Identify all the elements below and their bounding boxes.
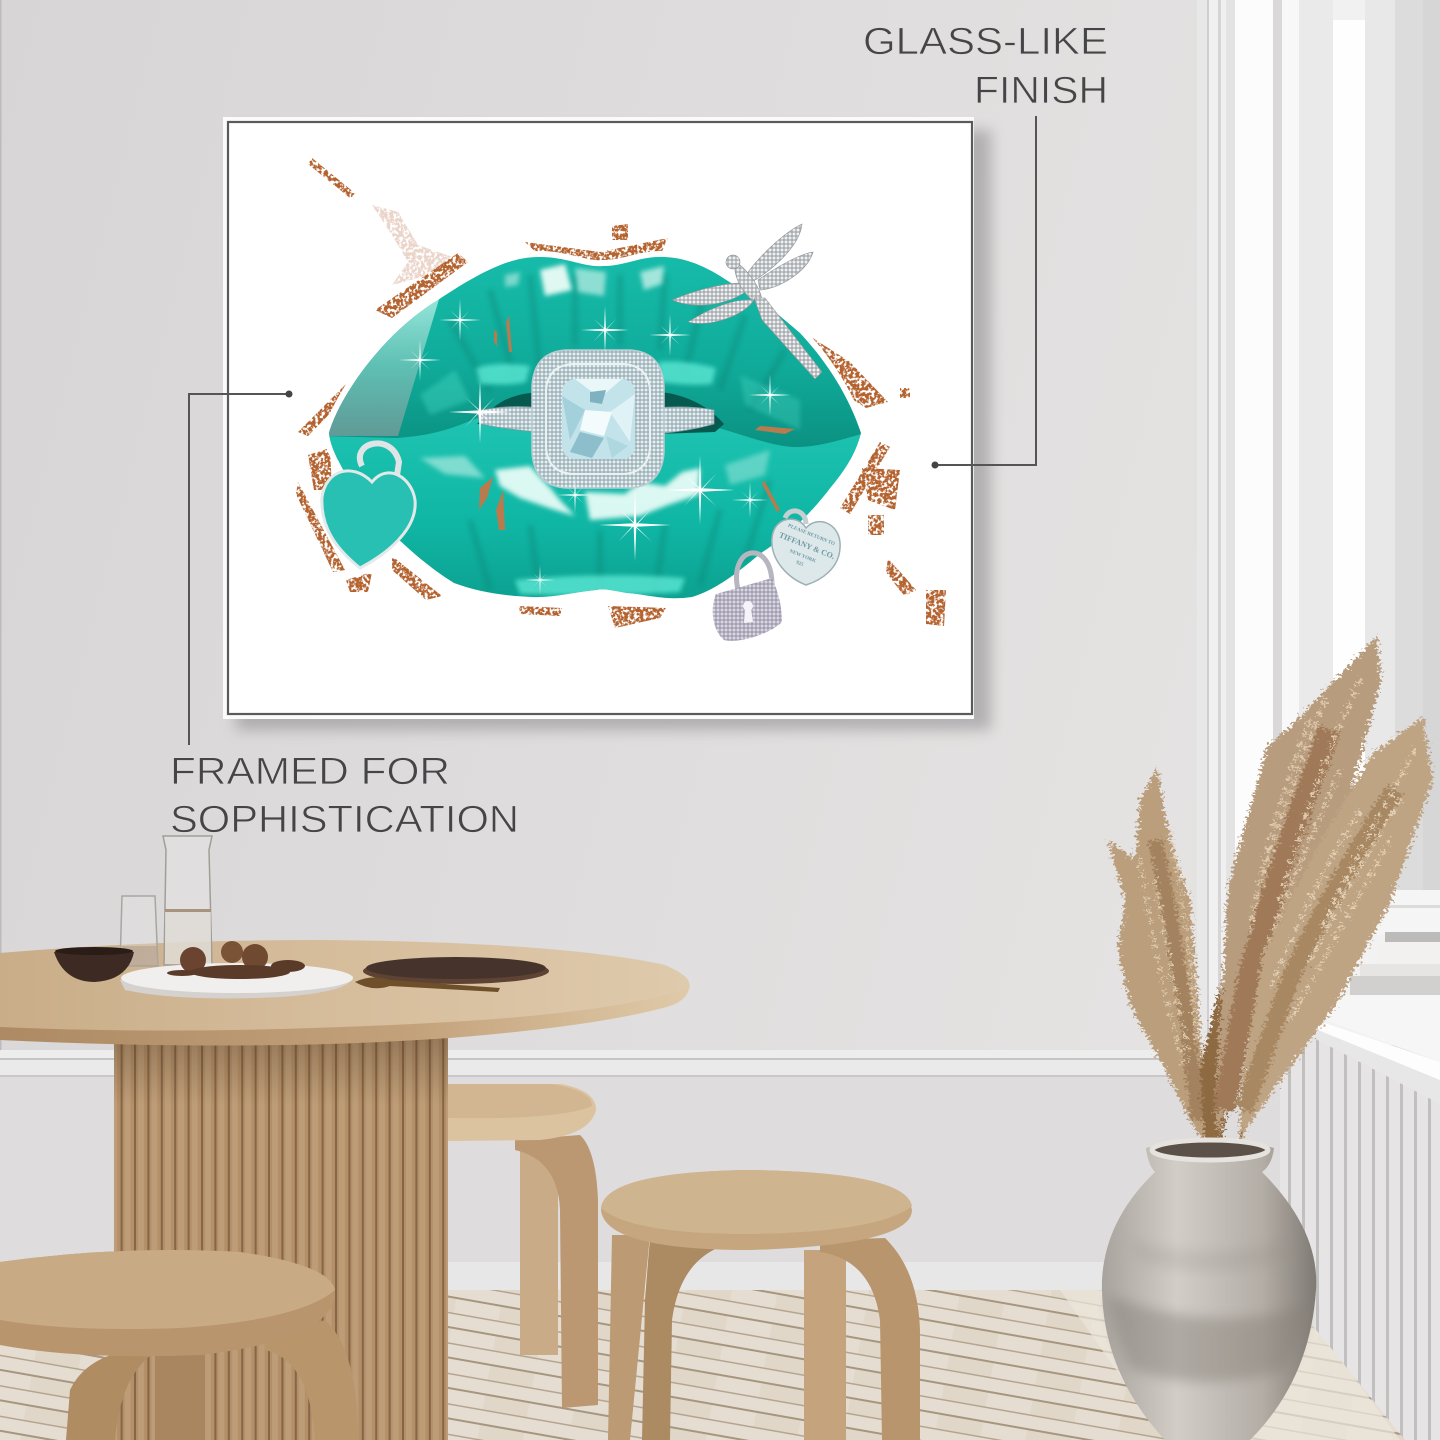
inner halo ring <box>546 364 650 474</box>
pedestal shadow <box>114 1035 448 1105</box>
return to Tiffany tag charm <box>771 511 840 585</box>
fluted pedestal <box>114 1030 448 1440</box>
dark wooden plate <box>363 957 549 984</box>
mouth opening <box>477 392 724 436</box>
teal heart charm <box>322 443 415 568</box>
window frame and trim <box>1197 0 1440 1045</box>
diamond ring <box>477 350 714 488</box>
upper lip <box>320 250 870 460</box>
bright teal glints <box>420 361 800 595</box>
inner canvas <box>228 122 972 714</box>
teal lips <box>320 250 870 610</box>
pampas grass in vase <box>1108 636 1433 1150</box>
rose gold flecks on lips <box>479 316 795 530</box>
ring halo <box>532 350 664 488</box>
sparkles <box>326 299 791 595</box>
callout leader line <box>936 116 1036 465</box>
frame shadow <box>236 130 991 730</box>
centre diamond <box>562 379 635 459</box>
white gloss patches lower lip <box>420 450 770 520</box>
tag engraving: PLEASE RETURN TO <box>787 524 835 547</box>
white gloss patches upper lip <box>505 264 664 296</box>
round dining table <box>0 940 690 1440</box>
chocolates <box>167 941 305 979</box>
callout: framed for sophistication <box>170 390 519 841</box>
right plume <box>1240 717 1433 1145</box>
marble tray <box>120 963 353 998</box>
table edge <box>0 985 690 1046</box>
pave padlock charm <box>713 553 782 641</box>
dark bowl <box>54 947 134 982</box>
spoon <box>355 977 500 992</box>
radiator <box>1280 1036 1440 1440</box>
glass carafe <box>163 836 212 965</box>
pale pink glitter splash <box>372 205 455 285</box>
lower lip <box>320 418 870 610</box>
dragonfly brooch <box>672 224 822 379</box>
tag engraving: TIFFANY & CO. <box>778 530 836 561</box>
glass reflection <box>325 296 440 436</box>
front right stool <box>601 1170 920 1440</box>
white outer frame <box>223 117 974 719</box>
callout: glass-like finish <box>863 21 1108 468</box>
tag engraving: NEW YORK <box>789 549 816 564</box>
lip crease lines <box>450 275 785 595</box>
window sill with books <box>1282 932 1440 1104</box>
tag engraving <box>771 522 839 578</box>
front left stool <box>0 1250 358 1440</box>
callout heading: GLASS-LIKE <box>863 21 1108 63</box>
stems <box>1160 900 1300 1150</box>
callout: framed for sophistication: SOPHISTICATION <box>170 799 519 841</box>
callout: glass-like finish: FINISH <box>974 70 1108 112</box>
framed artwork <box>223 117 991 730</box>
diamond facets <box>562 379 635 458</box>
middle plume <box>1215 636 1381 1140</box>
tag engraving: 925 <box>795 561 804 568</box>
ring band <box>477 407 714 434</box>
ceramic vase <box>1102 1140 1316 1440</box>
rose gold glitter splashes <box>296 158 946 628</box>
callout heading: FRAMED FOR <box>170 751 450 793</box>
small centre plume <box>1200 985 1235 1150</box>
white lips outline <box>329 257 861 598</box>
left plume <box>1108 767 1205 1140</box>
table top <box>0 940 689 1031</box>
callout leader line <box>189 394 289 745</box>
drinking glass <box>120 896 158 966</box>
back stool <box>448 1084 598 1408</box>
wooden floor <box>0 1290 1440 1440</box>
tabletop objects <box>54 836 549 998</box>
